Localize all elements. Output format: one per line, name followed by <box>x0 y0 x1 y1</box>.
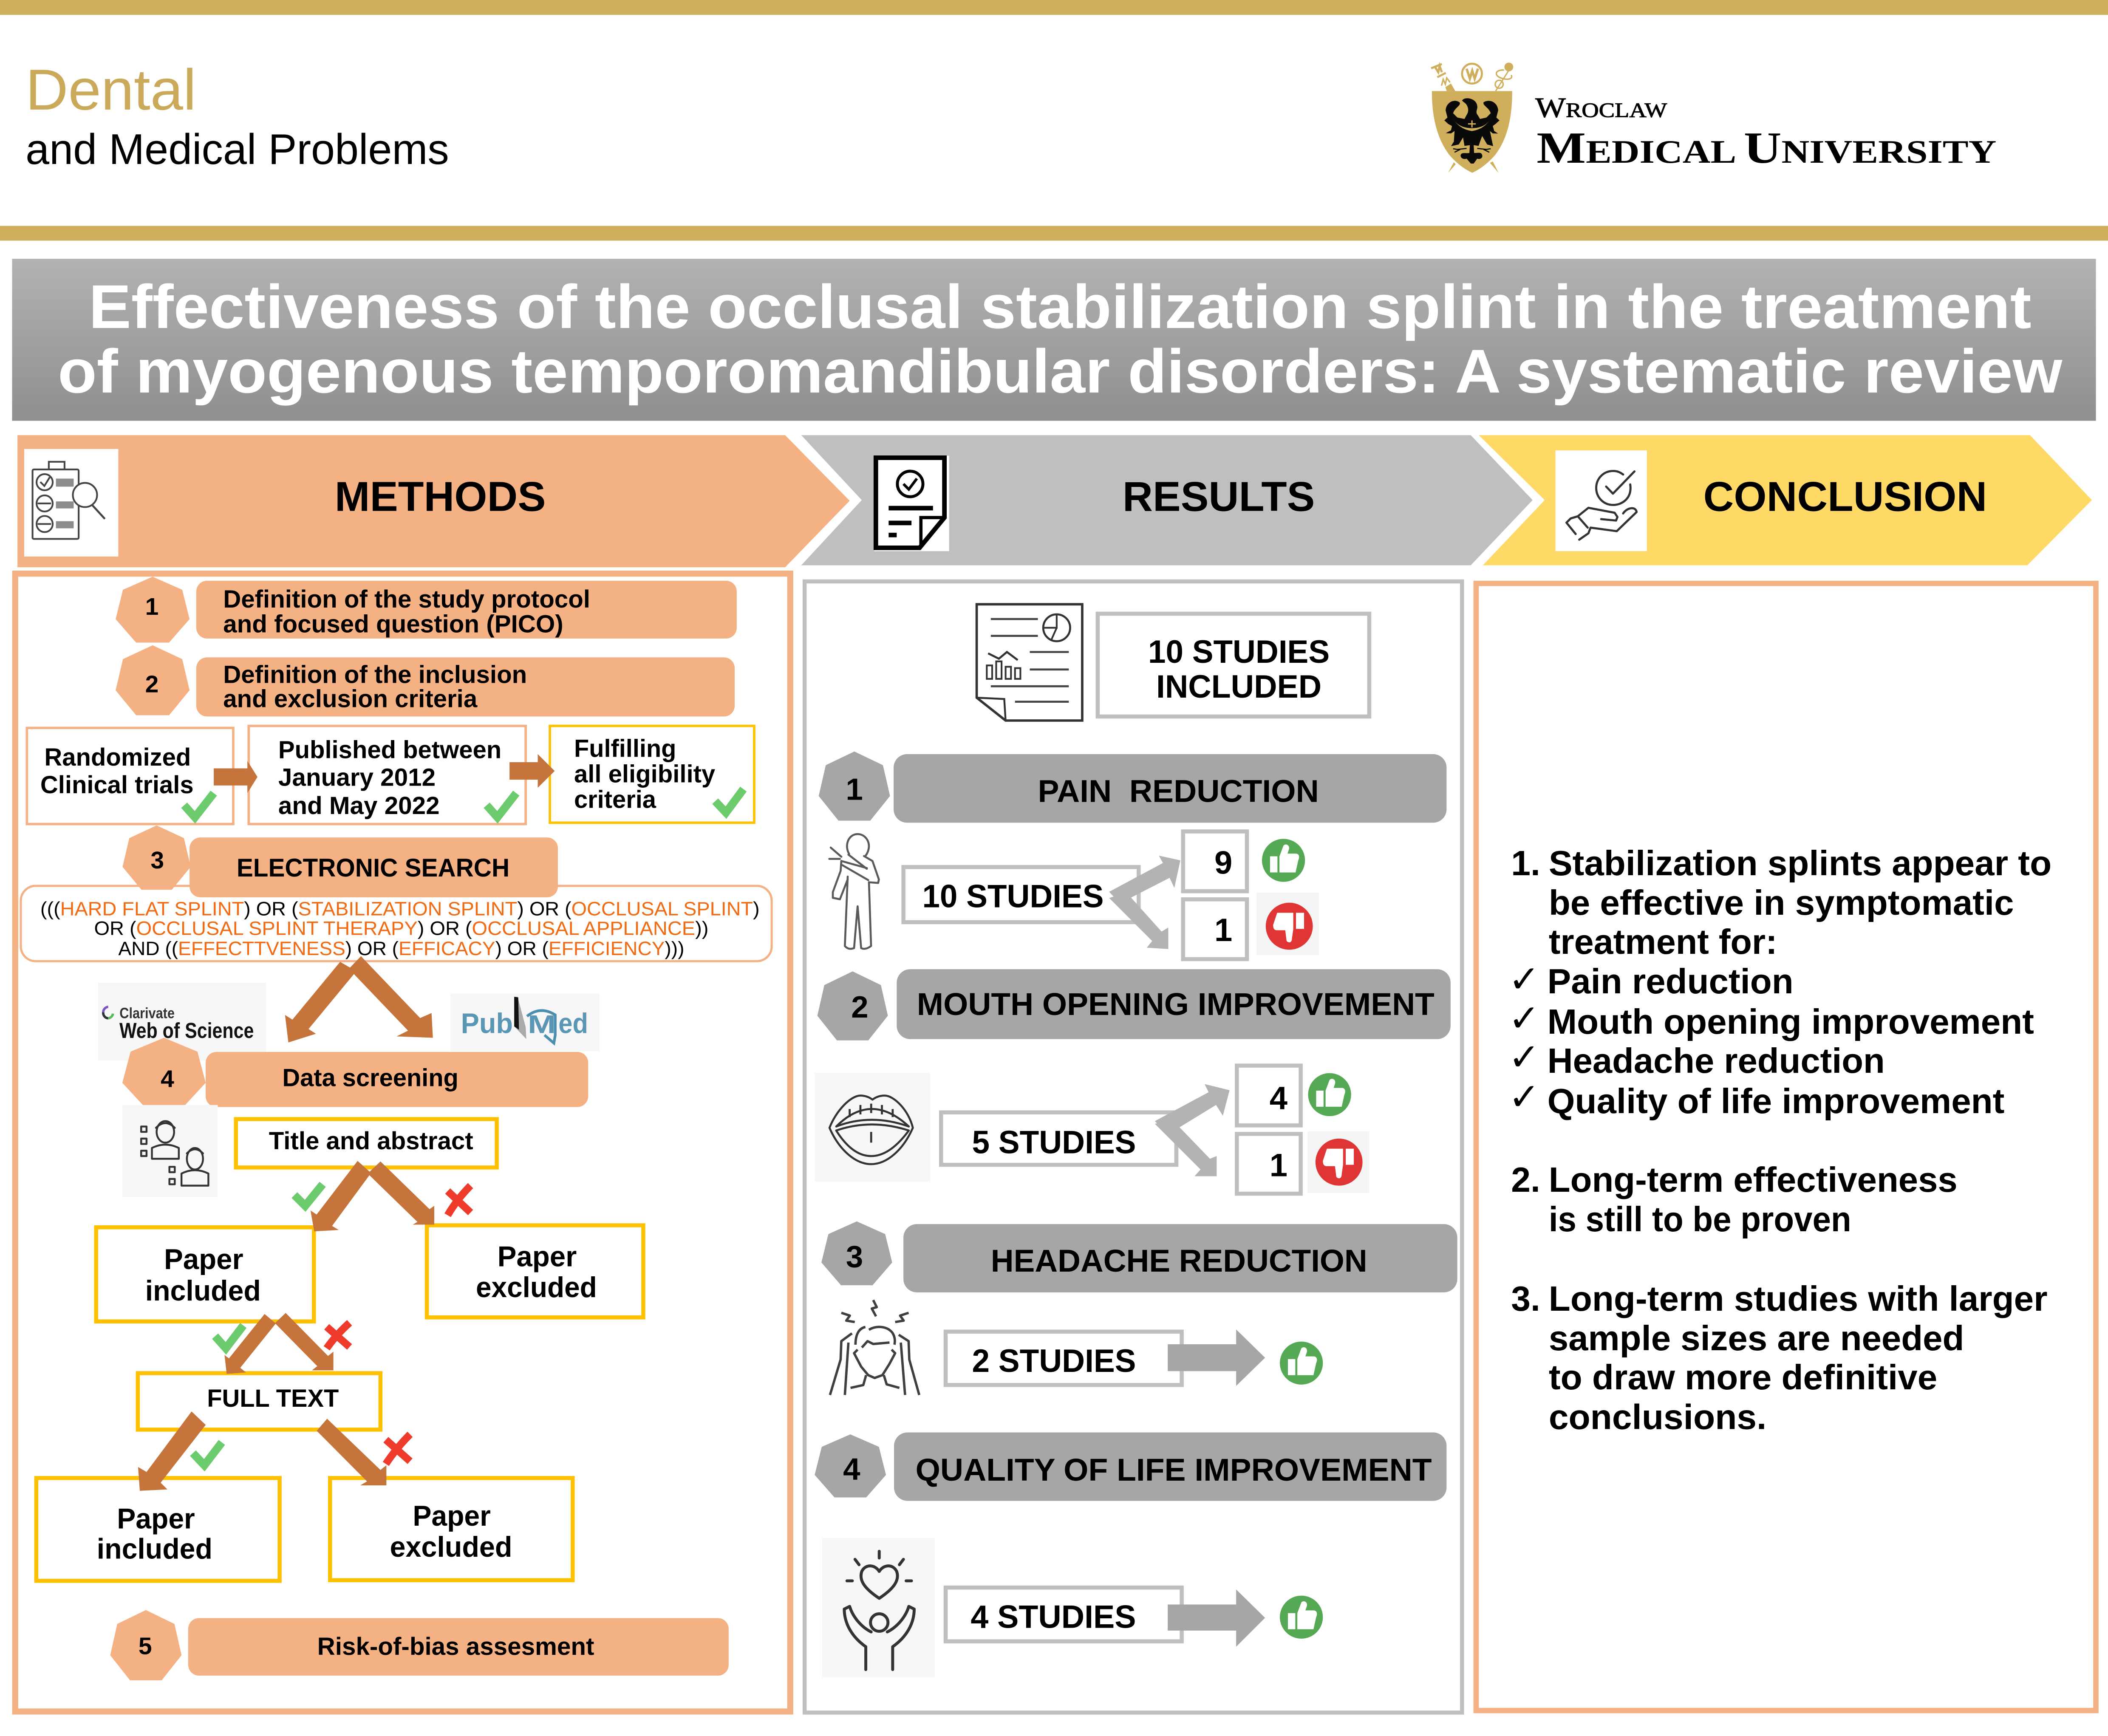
outcome 3 heading: HEADACHE REDUCTION <box>991 1243 1367 1278</box>
box: title and abstract: Title and abstract <box>269 1127 473 1155</box>
checklist of outcomes: Quality of life improvement <box>1548 1082 2004 1121</box>
outcome 2 heading <box>818 969 1451 1040</box>
logo: web of science: Web of Science <box>119 1018 254 1043</box>
step 2: Definition of the inclusion <box>223 661 527 688</box>
icon: thumbs down <box>1256 893 1319 955</box>
journal name: Dental <box>25 57 196 122</box>
university name: M EDICAL U NIVERSITY <box>1536 123 1996 172</box>
icon: check <box>215 1326 243 1348</box>
arrow: to positive <box>1109 856 1180 903</box>
box: full text <box>138 1373 380 1430</box>
box: 9 positive <box>1183 831 1247 891</box>
search string: (((HARD FLAT SPLINT ) OR (STABILIZATION SPLINT ) OR (OCCLUSAL SPLINT ) <box>40 898 760 920</box>
logo: web of science <box>98 983 266 1060</box>
icon: check <box>294 1184 323 1206</box>
arrow: to negative <box>1109 893 1168 949</box>
step 3: ELECTRONIC SEARCH <box>237 854 509 882</box>
box: full text: FULL TEXT <box>207 1385 339 1412</box>
conclusion 2: is still to be proven <box>1549 1200 1851 1239</box>
box: paper excluded <box>427 1225 643 1318</box>
icon: person in pain <box>829 834 879 949</box>
icon: report document <box>876 458 945 548</box>
panel: methods <box>15 574 790 1711</box>
box: final paper included: Paper <box>117 1502 195 1535</box>
conclusion 3: conclusions. <box>1549 1398 1766 1436</box>
step 1: and focused question (PICO) <box>223 611 563 638</box>
icon: thumbs up <box>1262 839 1305 882</box>
outcome 2 heading: 2 <box>851 990 869 1024</box>
icon: hand with check <box>1567 471 1637 540</box>
panel: results <box>805 581 1462 1713</box>
journal name: and Medical Problems <box>25 125 449 173</box>
conclusion 3: 3. <box>1511 1280 1540 1318</box>
icon: checklist with magnifier <box>33 462 105 539</box>
box: 10 studies included: 10 STUDIES <box>1148 634 1330 670</box>
conclusion 3 <box>1511 1280 2048 1436</box>
logo: pubmed <box>450 993 600 1051</box>
outcome 4 heading: 4 <box>843 1452 860 1486</box>
search string: OR (OCCLUSAL SPLINT THERAPY ) OR (OCCLUSAL APPLIANCE )) <box>94 917 708 939</box>
arrow: to positive <box>1155 1084 1230 1134</box>
icon: open mouth <box>815 1073 930 1182</box>
conclusion 3: Long-term studies with larger <box>1549 1280 2048 1318</box>
criteria: randomized clinical trials: Randomized <box>44 744 191 771</box>
criteria: eligibility: criteria <box>574 786 656 814</box>
icon: check <box>193 1442 222 1465</box>
box: 10 studies included <box>1098 614 1369 716</box>
icon: quality of life <box>822 1538 935 1678</box>
conclusion 2: Long-term effectiveness <box>1549 1161 1958 1199</box>
criteria: randomized clinical trials: Clinical trials <box>40 771 194 799</box>
header: results: RESULTS <box>1123 473 1315 520</box>
box: 4 positive: 4 <box>1270 1080 1287 1116</box>
box: 10 studies: 10 STUDIES <box>922 879 1104 915</box>
box: 1 negative: 1 <box>1214 912 1232 948</box>
arrow: full text to included <box>138 1411 206 1491</box>
lower gold band <box>0 226 2108 240</box>
search string <box>21 886 772 961</box>
step 1 <box>116 577 737 643</box>
university logo <box>1431 62 1996 173</box>
top gold band <box>0 0 2108 15</box>
criteria: eligibility <box>550 726 754 823</box>
conclusion 2: 2. <box>1511 1161 1540 1199</box>
logo: pubmed: Pub <box>461 1008 513 1040</box>
icon: headache <box>830 1300 919 1395</box>
header: methods: METHODS <box>335 473 546 520</box>
conclusion 1: Stabilization splints appear to <box>1549 844 2051 883</box>
box: final paper included <box>36 1478 280 1581</box>
checklist of outcomes: Pain reduction <box>1548 962 1794 1001</box>
conclusion 1: 1. <box>1511 844 1540 883</box>
header: conclusion <box>1479 435 2092 565</box>
box: 4 positive <box>1237 1066 1301 1125</box>
box: paper excluded: excluded <box>476 1271 597 1303</box>
box: 5 studies <box>941 1112 1176 1165</box>
box: paper included: Paper <box>164 1243 243 1275</box>
outcome 3 heading: 3 <box>846 1240 863 1274</box>
criteria: publication date: and May 2022 <box>278 792 440 820</box>
icon: thumbs up <box>1280 1342 1323 1385</box>
icon: thumbs up <box>1280 1596 1323 1639</box>
outcome 2 heading: MOUTH OPENING IMPROVEMENT <box>917 987 1435 1022</box>
step 3 <box>122 826 558 897</box>
icon: cross <box>448 1186 470 1215</box>
outcome 3 heading <box>821 1221 1457 1292</box>
conclusion 1: be effective in symptomatic <box>1549 884 2014 922</box>
arrow: to positive <box>1168 1329 1265 1386</box>
criteria: eligibility: Fulfilling <box>574 735 676 762</box>
step 2: 2 <box>145 670 158 698</box>
icon: reviewers <box>122 1105 218 1197</box>
header: methods <box>17 435 850 567</box>
criteria: publication date <box>249 726 526 824</box>
checklist of outcomes: Mouth opening improvement <box>1548 1003 2034 1041</box>
step 2 <box>116 645 735 716</box>
checklist of outcomes: ✓ <box>1508 996 1540 1040</box>
arrow: included to full text right <box>275 1313 334 1370</box>
icon: study document <box>977 604 1082 721</box>
icon: thumbs down <box>1307 1131 1369 1193</box>
criteria: publication date: Published between <box>278 736 501 764</box>
step 5 <box>110 1610 729 1680</box>
arrow: search to web of science <box>285 962 356 1043</box>
checklist of outcomes: ✓ <box>1508 1035 1540 1079</box>
step 1: 1 <box>145 593 158 620</box>
criteria: eligibility: all eligibility <box>574 760 716 788</box>
logo: pubmed: ed <box>558 1008 588 1040</box>
box: paper included <box>96 1227 314 1321</box>
step 4: Data screening <box>282 1064 458 1092</box>
box: title and abstract <box>236 1119 497 1168</box>
outcome 1 heading: PAIN REDUCTION <box>1038 773 1319 809</box>
step 5: Risk-of-bias assesment <box>317 1633 594 1660</box>
step 4: 4 <box>161 1066 174 1093</box>
journal name <box>25 57 449 173</box>
box: 2 studies: 2 STUDIES <box>972 1343 1136 1379</box>
checklist of outcomes: ✓ <box>1508 957 1540 1001</box>
icon: thumbs up <box>1308 1073 1351 1116</box>
box: 4 studies <box>945 1588 1182 1641</box>
box: 1 negative <box>1183 899 1247 959</box>
box: final paper excluded <box>330 1478 573 1580</box>
panel: conclusion <box>1476 583 2096 1711</box>
criteria: publication date: January 2012 <box>278 763 436 791</box>
box: 10 studies <box>903 867 1139 922</box>
arrow: to positive <box>1168 1589 1265 1647</box>
box: 9 positive: 9 <box>1214 845 1232 881</box>
header: results <box>801 435 1533 565</box>
icon: cross <box>327 1323 350 1348</box>
conclusion 2 <box>1511 1161 1958 1239</box>
box: 5 studies: 5 STUDIES <box>972 1125 1136 1161</box>
box: 2 studies <box>945 1332 1182 1385</box>
checklist of outcomes: Headache reduction <box>1548 1042 1885 1080</box>
arrow: to negative <box>1155 1120 1217 1176</box>
header: conclusion: CONCLUSION <box>1703 473 1987 520</box>
checklist of outcomes: ✓ <box>1508 1075 1540 1119</box>
conclusion 1 <box>1511 844 2051 961</box>
box: paper included: included <box>145 1275 261 1307</box>
box: final paper included: included <box>97 1533 212 1565</box>
box: final paper excluded: Paper <box>413 1500 491 1532</box>
box: final paper excluded: excluded <box>390 1531 512 1563</box>
checklist of outcomes <box>1508 957 2034 1121</box>
university name <box>1535 92 1996 172</box>
step 4 <box>122 1038 588 1108</box>
title banner: of myogenous temporomandibular disorders: A systematic review <box>58 336 2063 406</box>
step 2: and exclusion criteria <box>223 685 478 712</box>
arrow: criteria 2 to 3 <box>509 754 555 788</box>
logo: web of science: Clarivate <box>119 1005 175 1022</box>
outcome 4 heading: QUALITY OF LIFE IMPROVEMENT <box>916 1452 1432 1487</box>
title banner <box>12 259 2096 421</box>
arrow: criteria 1 to 2 <box>214 761 257 793</box>
outcome 1 heading: 1 <box>846 772 863 807</box>
logo: pubmed: M <box>528 1010 556 1039</box>
box: 4 studies: 4 STUDIES <box>971 1599 1136 1635</box>
step 5: 5 <box>139 1633 152 1660</box>
step 1: Definition of the study protocol <box>223 585 590 613</box>
conclusion 3: sample sizes are needed <box>1549 1319 1964 1358</box>
outcome 4 heading <box>815 1433 1446 1501</box>
arrow: full text to excluded <box>317 1419 386 1485</box>
box: paper excluded: Paper <box>498 1240 577 1272</box>
icon: cross <box>386 1434 410 1464</box>
box: 10 studies included: INCLUDED <box>1156 669 1321 705</box>
outcome 1 heading <box>819 752 1446 823</box>
arrow: search to pubmed <box>349 956 433 1038</box>
criteria: randomized clinical trials <box>27 728 233 824</box>
arrow: abstract to included <box>311 1161 371 1231</box>
step 3: 3 <box>150 847 164 874</box>
arrow: included to full text left <box>224 1314 276 1374</box>
search string: AND ((EFFECTTVENESS) OR (EFFICACY) OR (EFFICIENCY))) <box>118 937 684 959</box>
box: 1 negative: 1 <box>1270 1147 1287 1183</box>
arrow: abstract to excluded <box>368 1162 434 1224</box>
conclusion 1: treatment for: <box>1549 923 1777 961</box>
box: 1 negative <box>1237 1134 1301 1194</box>
title banner: Effectiveness of the occlusal stabilization splint in the treatment <box>89 272 2032 341</box>
icon: shield crest <box>1431 62 1513 173</box>
conclusion 3: to draw more definitive <box>1549 1358 1937 1397</box>
university name: W ROCLAW <box>1535 92 1667 123</box>
